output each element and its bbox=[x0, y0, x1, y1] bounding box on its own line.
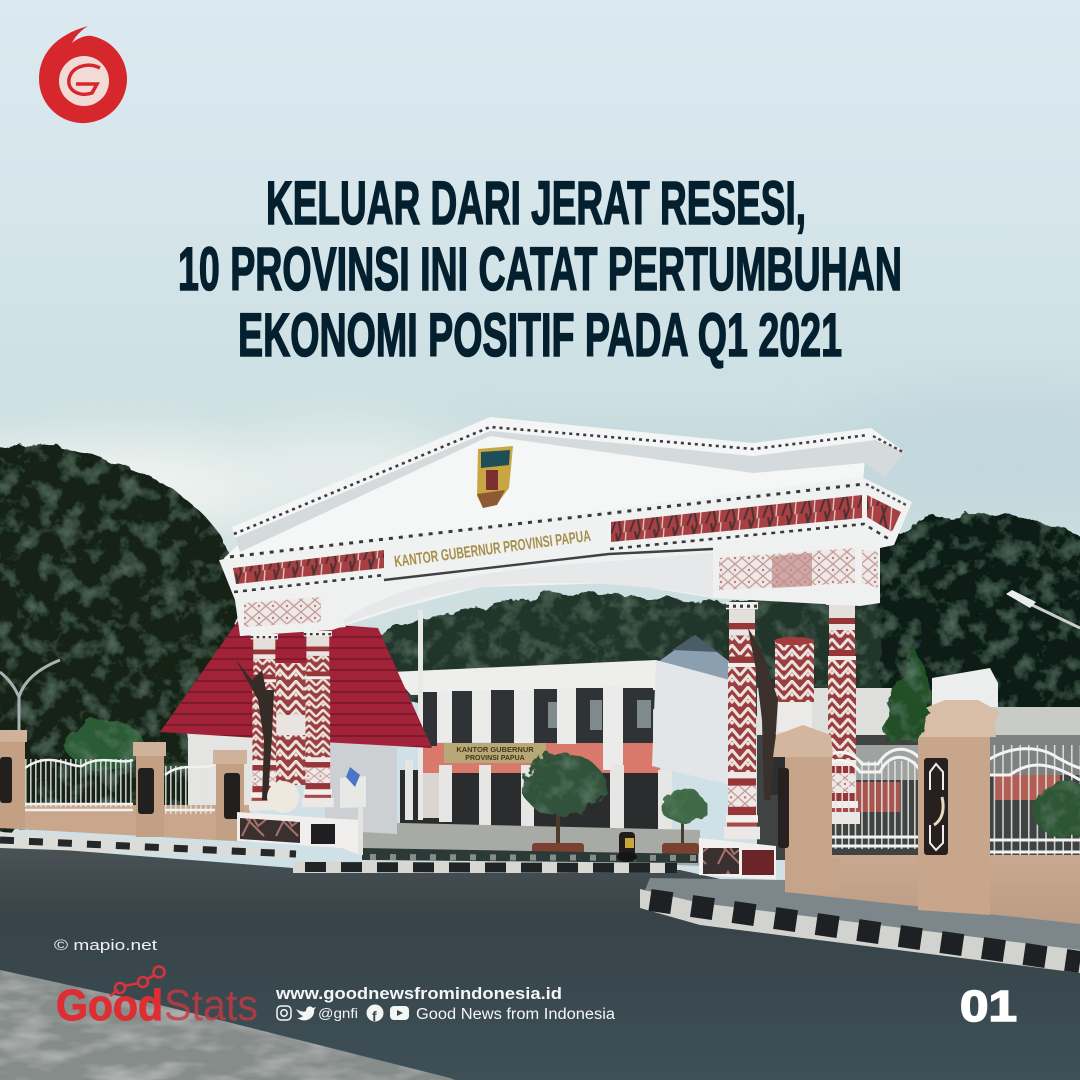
left curb bbox=[0, 832, 296, 858]
GoodStats logo bbox=[56, 966, 258, 1030]
page number: 01 bbox=[960, 982, 1017, 1031]
website url: www.goodnewsfromindonesia.id bbox=[275, 984, 562, 1003]
gable face bbox=[222, 430, 866, 560]
house right wall bbox=[325, 738, 397, 834]
ornament red centre bbox=[772, 553, 812, 588]
round emblem bbox=[267, 781, 299, 813]
trend line icon bbox=[110, 966, 164, 996]
white below cylinder bbox=[778, 702, 812, 732]
trees: right canopy bbox=[860, 513, 1080, 720]
website and social footer bbox=[275, 984, 615, 1024]
icon: twitter bbox=[296, 1006, 316, 1020]
right block ornament bbox=[719, 548, 855, 590]
left block ornament bbox=[244, 597, 321, 627]
left street lamp bbox=[0, 660, 60, 735]
left totem columns bbox=[236, 631, 362, 856]
right wall and fence bbox=[645, 590, 1080, 955]
upper band bbox=[391, 660, 656, 695]
red roof bbox=[160, 618, 432, 748]
cornice dots bbox=[234, 427, 868, 534]
window glass bbox=[548, 700, 651, 730]
arch soffit bbox=[332, 552, 713, 628]
salmon band bbox=[418, 743, 660, 773]
flagpole bbox=[418, 610, 423, 820]
foreground sidewalk bbox=[0, 970, 455, 1080]
icon: instagram bbox=[277, 1006, 291, 1020]
left base bbox=[237, 812, 362, 856]
ground columns bbox=[405, 760, 672, 830]
fence one railings bbox=[815, 761, 920, 849]
fence arcs bbox=[815, 749, 1080, 852]
carved wooden post bbox=[236, 660, 274, 800]
right curb bbox=[640, 889, 1080, 973]
road bbox=[0, 845, 1080, 1080]
courtyard ground bbox=[360, 822, 700, 866]
lower cornice dots bbox=[220, 484, 864, 558]
bush behind fence bbox=[1033, 782, 1080, 838]
icon: youtube bbox=[390, 1006, 409, 1020]
frieze lower dots bbox=[234, 524, 892, 592]
central decorated column bbox=[274, 663, 307, 785]
house left wall bbox=[188, 730, 258, 812]
sky bbox=[0, 0, 1080, 650]
emblem bbox=[477, 446, 513, 508]
low wall bbox=[785, 855, 1080, 924]
street lamp right bbox=[1006, 590, 1080, 628]
cornice underside shadow bbox=[234, 426, 905, 552]
small courtyard tree bbox=[661, 788, 705, 855]
pillars bbox=[0, 738, 25, 828]
upper windows bbox=[423, 688, 653, 746]
right base bbox=[699, 838, 776, 880]
main beam bbox=[219, 477, 912, 636]
clouds bbox=[0, 390, 1080, 535]
icon: facebook bbox=[366, 1004, 384, 1024]
middle curb strip bbox=[362, 848, 698, 863]
building sign: KANTOR GUBERNUR bbox=[456, 745, 534, 754]
wall bbox=[0, 805, 250, 842]
sidewalk bbox=[645, 878, 1080, 955]
left frieze bbox=[233, 550, 384, 584]
railings bbox=[25, 759, 133, 807]
carved wooden post right bbox=[748, 628, 778, 800]
cornice top bbox=[232, 417, 905, 538]
gate arch bbox=[219, 417, 912, 636]
motorcycle bbox=[617, 832, 637, 862]
gate sign text: KANTOR GUBERNUR PROVINSI PAPUA bbox=[393, 528, 592, 571]
government building bbox=[391, 610, 730, 830]
dome bbox=[658, 635, 730, 680]
trees: behind arch bbox=[365, 590, 880, 720]
building sign: PROVINSI PAPUA bbox=[465, 755, 525, 762]
fence two railings bbox=[985, 745, 1080, 855]
right block bbox=[713, 542, 880, 606]
right side frieze bbox=[867, 495, 901, 532]
trees: left canopy bbox=[0, 444, 260, 830]
house roof and walls bbox=[160, 618, 432, 834]
road sign left bbox=[340, 767, 366, 855]
left fence and wall bbox=[0, 730, 250, 842]
bush left bbox=[67, 719, 143, 771]
front curb bbox=[293, 861, 677, 873]
logo: Good News from Indonesia bbox=[39, 26, 127, 123]
building sign bbox=[444, 743, 546, 763]
left block bbox=[239, 590, 346, 636]
logo ring bbox=[59, 56, 109, 106]
tall bush bbox=[885, 646, 932, 740]
Good: Good bbox=[56, 981, 163, 1030]
beam shadow bbox=[384, 549, 713, 580]
icon: facebook: f bbox=[372, 1008, 377, 1024]
ground floor interior bbox=[400, 770, 662, 830]
pillar one bbox=[773, 725, 840, 895]
right block side ornament bbox=[862, 550, 878, 588]
red cylinder bbox=[774, 637, 814, 702]
tree in courtyard bbox=[522, 753, 604, 855]
right towers bbox=[699, 598, 860, 880]
logo G mark bbox=[69, 65, 100, 94]
title bbox=[178, 169, 902, 369]
right block bbox=[652, 660, 730, 785]
handle: @gnfi bbox=[318, 1005, 358, 1021]
photo credit: © mapio.net bbox=[54, 937, 158, 954]
pillar two bbox=[915, 700, 1000, 915]
right frieze bbox=[611, 495, 862, 542]
Stats: Stats bbox=[164, 981, 258, 1030]
brand name: Good News from Indonesia bbox=[416, 1006, 615, 1023]
pillar panels bbox=[0, 757, 12, 803]
right white building bbox=[757, 668, 1080, 860]
upper columns bbox=[437, 686, 623, 770]
